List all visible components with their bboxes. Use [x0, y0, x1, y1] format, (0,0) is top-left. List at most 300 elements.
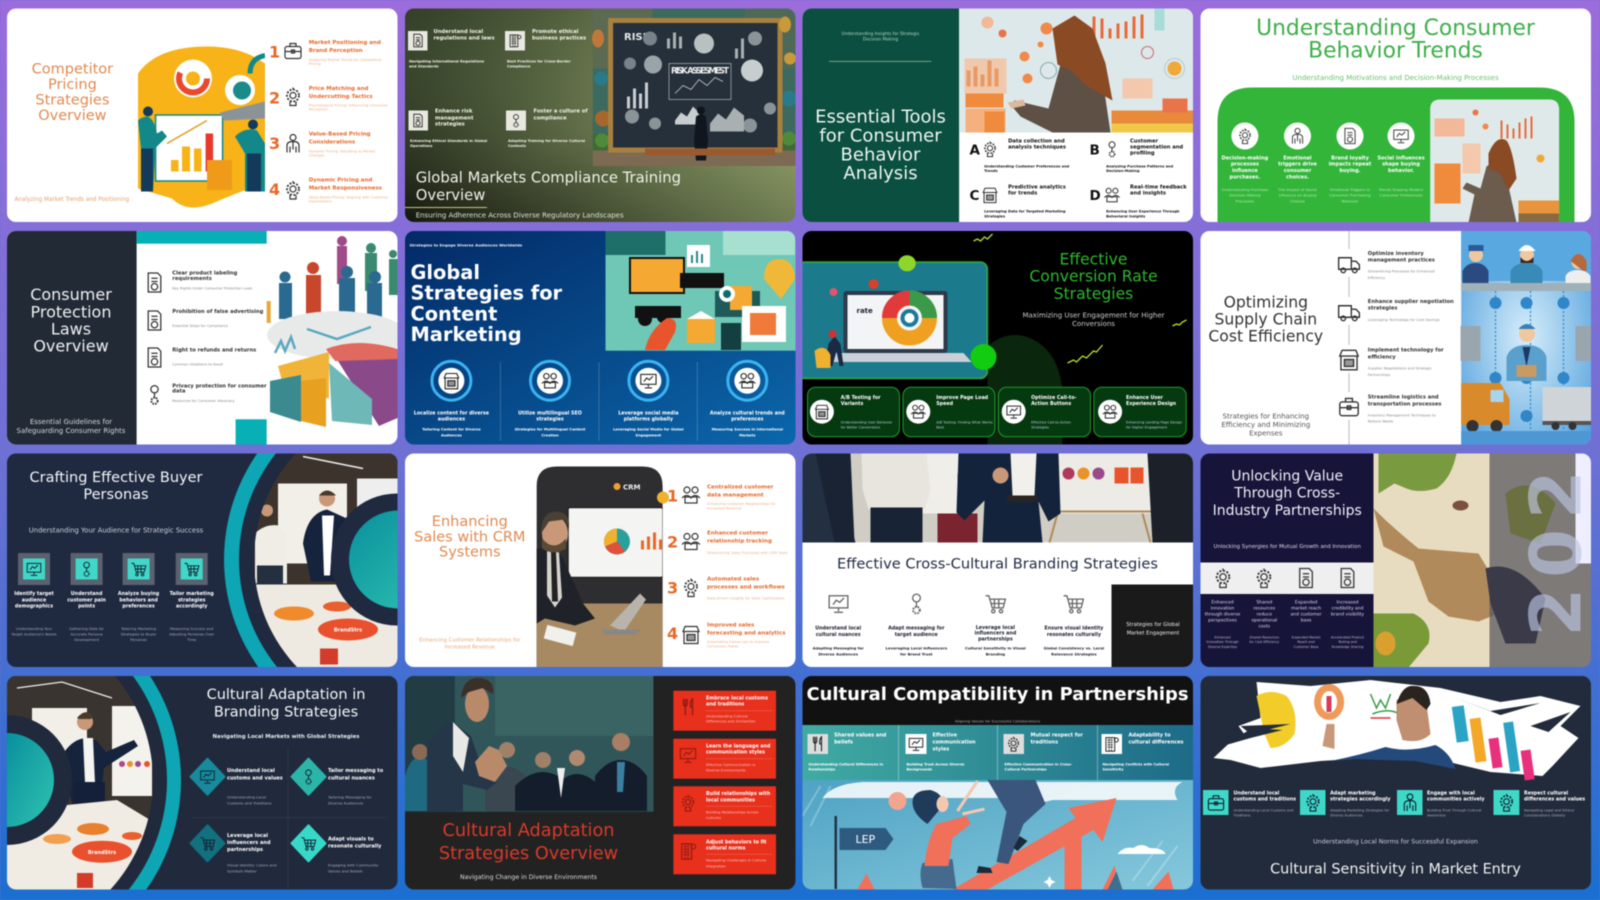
item: cultural nuances: cultural nuances [816, 632, 861, 638]
icon [1300, 569, 1312, 587]
item: emotional triggers: Choices [1290, 198, 1305, 204]
item: page load: Speed [936, 401, 954, 407]
item: shared values: beliefs [834, 740, 853, 746]
item: A/B testing: Understanding User Behavior [841, 420, 892, 424]
item: localize content: audiences [438, 417, 465, 423]
item: tailor marketing [169, 553, 215, 642]
icon [1341, 569, 1354, 587]
item: demographics: Target Audience's Needs [10, 632, 57, 636]
title: Crafting Effective Buyer [29, 470, 203, 486]
item: mutual respect [1004, 733, 1083, 771]
item B [1090, 138, 1183, 173]
item 4: Dynamic Pricing and [309, 178, 372, 184]
panel: Consumer Protection Laws Overview [7, 231, 407, 444]
item: shared resources: Shared Resources [1250, 636, 1279, 640]
item: risk management: Enhance risk [435, 108, 472, 114]
subtitle: Analyzing Market Trends and Positioning [14, 197, 130, 203]
item: customs: Embrace local customs [706, 696, 768, 701]
subtitle: Strategies for Enhancing [1223, 412, 1309, 420]
item: customs and traditions: Traditions [1232, 813, 1251, 817]
item: technology: Partnerships [1368, 373, 1390, 377]
title: for Consumer [819, 126, 942, 146]
title: Protection [31, 302, 111, 321]
item: call-to-action: Effective Call-to-Action [1031, 420, 1071, 424]
item: social media [613, 361, 684, 438]
item: inventory: management practices [1368, 258, 1435, 264]
item: communication: Building Trust Across Diverse [906, 762, 964, 766]
subtitle: Understanding Local Norms for Successful Expansion [1313, 838, 1478, 845]
icon [1231, 122, 1258, 150]
item 1: Increased Revenue [707, 506, 742, 510]
subtitle: Safeguarding Consumer Rights [17, 427, 126, 435]
item: language [673, 739, 776, 779]
icon [913, 594, 920, 613]
title: Effective [1059, 250, 1128, 268]
item: behaviors: cultural norms [706, 846, 746, 852]
item: shared resources: for Cost Efficiency [1249, 640, 1279, 644]
item: adaptability [1102, 733, 1183, 771]
item: cultural differences: differences and values [1524, 796, 1585, 802]
subtitle: Conversions [1072, 320, 1115, 328]
item: refunds: Right to refunds and returns [172, 347, 256, 353]
item: visual identity: Global Consistency vs. Local [1044, 646, 1104, 650]
title: Cultural Adaptation [442, 821, 615, 841]
item B: B [1090, 142, 1100, 158]
item: decision-making: processes [1231, 162, 1259, 168]
icon [728, 361, 767, 400]
sign: LEP [834, 816, 894, 889]
item 1: Pricing [309, 62, 321, 66]
item: local regulations: Navigating International Regulations [409, 60, 484, 64]
icon [683, 795, 693, 811]
item: innovation: Diverse Expertise [1208, 645, 1237, 649]
item: customs: Understanding Cultural [706, 715, 748, 719]
item: innovation: Innovation Through [1206, 640, 1239, 644]
item 1 [667, 484, 776, 510]
decorative teal ring and photo [7, 676, 181, 890]
item: marketing strategies: Adapting Marketing Strategies for [1330, 809, 1389, 813]
item: marketing strategies: Diverse Audiences [1330, 813, 1363, 817]
subtitle: Enhancing Customer Relationships for [419, 638, 520, 644]
icon [71, 553, 103, 585]
item: labeling [148, 271, 252, 292]
item: marketing strategies [1300, 790, 1391, 817]
item: language: Effective Communication in [706, 763, 756, 767]
item: call-to-action [998, 387, 1090, 437]
icon [682, 487, 700, 503]
item: social media: Leverage social media [618, 411, 679, 416]
item: market reach [1291, 569, 1322, 649]
item: localize content: Tailoring Content for Diverse [422, 428, 481, 432]
sign: LEP: LEP [855, 833, 876, 846]
icon [1388, 122, 1414, 150]
item: marketing strategies: Adapt marketing [1330, 791, 1376, 796]
title: Analysis [843, 163, 918, 184]
title: Cultural Compatibility in Partnerships [806, 684, 1188, 705]
decorative teal ring and photo: BrandStrs [334, 628, 362, 634]
item: pain points: customer pain [67, 598, 107, 604]
item: local communities [1397, 790, 1485, 817]
item: local communities: Building Trust Through Cultural [1427, 809, 1481, 813]
item: social influences: Trends Shaping Modern [1379, 187, 1423, 192]
item: social influences: Consumer Preferences [1380, 192, 1422, 198]
item: ethical business: Best Practices for Cross-Border [507, 60, 571, 64]
item: technology [1336, 345, 1444, 377]
item: customs and values: Understand local [227, 768, 275, 774]
item: local influencers: Leverage local [227, 833, 268, 839]
item: risk management [408, 108, 487, 148]
item 3: 3 [667, 578, 678, 598]
icon [808, 734, 828, 754]
item: emotional triggers: triggers drive [1278, 162, 1317, 168]
item: multilingual SEO: Creation [541, 434, 559, 438]
item 1: Centralized customer [707, 484, 773, 490]
photo: man at CRM dashboard: CRM [623, 484, 641, 492]
icon [682, 534, 700, 550]
callout: tagline box: Market Engagement [1127, 630, 1179, 636]
item 1: data management [707, 492, 764, 498]
item A: analysis techniques [1008, 144, 1066, 150]
item: cultural trends: preferences [731, 417, 764, 423]
item: user experience: Enhance User [1126, 396, 1163, 401]
item: visual identity: Ensure visual identity [1044, 626, 1103, 632]
title: Strategies for [410, 282, 563, 305]
icon [684, 699, 692, 715]
item: localize content: Audiences [441, 434, 462, 438]
item: cultural trends: Measuring Success in International [712, 428, 783, 432]
item: adapt visuals: Engaging with Community [328, 862, 378, 867]
photo: risk assessment chalkboard [592, 8, 797, 166]
item: pain points: Understand [71, 592, 102, 597]
icon [829, 596, 848, 612]
item D: D [1090, 188, 1101, 204]
panel: Effective Cross-Cultural Branding Strategies [802, 454, 1193, 667]
item: shared resources: reduce [1257, 612, 1272, 618]
item 2: Psychological Pricing: Influencing Consumer [309, 104, 388, 108]
item 4: 4 [667, 624, 678, 643]
item: demographics: demographics [15, 604, 53, 610]
item: tailor marketing: Time [186, 638, 197, 642]
photo: man pointing with team [405, 676, 654, 812]
item B: segmentation and [1130, 144, 1183, 150]
item A: A [970, 142, 980, 158]
subtitle: Aligning Values for Successful Collaborations [955, 718, 1040, 723]
item: market reach: Expanded [1295, 600, 1317, 606]
item: local influencers: influencers and [227, 840, 271, 846]
item: local influencers: partnerships [227, 847, 263, 853]
item: inventory: Streamlining Processes for Enhanced [1368, 270, 1435, 274]
title: Global Markets Compliance Training [416, 170, 681, 186]
item: customs and traditions: customs and traditions [1234, 796, 1296, 802]
title: Behavior [841, 144, 921, 166]
title: Conversion Rate [1029, 268, 1158, 286]
subtitle: Essential Guidelines for [30, 418, 112, 426]
icon [1203, 790, 1228, 815]
illustration: laptop with donut chart: rate [856, 307, 873, 315]
item: culture of compliance: Adapting Training for Diverse Cultural [508, 139, 585, 143]
title: Cost Efficiency [1208, 328, 1323, 346]
item 4: 4 [269, 180, 280, 199]
decorative year numerals: 202 [1516, 460, 1598, 636]
title: Overview [38, 108, 107, 124]
icon [1336, 249, 1362, 277]
eyebrow text: Strategies to Engage Diverse Audiences Worldwide [410, 243, 523, 248]
item: market reach: market reach [1291, 606, 1321, 612]
item: demographics: Understanding Your [16, 627, 52, 631]
subtitle: Understanding Insights for Strategic [842, 32, 919, 37]
item: cultural differences: Respect cultural [1524, 791, 1568, 796]
item: adapt visuals [292, 825, 382, 874]
item 2: Enhanced customer [707, 530, 768, 536]
item: behaviors [673, 834, 776, 874]
item: risk management: Enhancing Ethical Standards in Global [410, 139, 487, 143]
item: social influences: shape buying [1382, 162, 1420, 168]
item: logistics: transportation processes [1368, 401, 1441, 407]
icon [1336, 297, 1362, 325]
item B: Customer [1130, 138, 1158, 144]
item: tailor messaging [292, 759, 384, 805]
item: inventory [1336, 249, 1435, 280]
item C: Predictive analytics [1008, 184, 1066, 190]
item 4: Improved sales [707, 622, 754, 628]
item: emotional triggers: consumer [1284, 168, 1312, 174]
item 4 [667, 622, 786, 648]
item: relationships: Build relationships with [706, 792, 770, 797]
item: user experience: for Higher Engagement [1126, 425, 1168, 429]
item B: Decision-Making [1106, 169, 1140, 173]
item: refunds: Common Violations to Avoid [172, 362, 223, 366]
item: labeling: requirements [172, 276, 212, 282]
item: ethical business: business practices [532, 36, 586, 42]
item: adapt messaging: Adapt messaging for [888, 626, 944, 632]
illustration: marketing team with chart [138, 46, 265, 208]
item: A/B testing: for Better Conversions [841, 425, 880, 429]
photo: team at branding boards [802, 454, 1193, 542]
icon [1494, 790, 1519, 815]
icon [18, 553, 50, 585]
icon [1258, 569, 1270, 587]
item: culture of compliance: Contexts [508, 144, 526, 148]
item: market reach: base [1301, 618, 1312, 624]
title: Systems [439, 544, 501, 560]
item: shared resources: costs [1258, 624, 1271, 630]
item: user experience: Enhancing Landing Page Design [1126, 420, 1182, 424]
item: cultural nuances [813, 596, 864, 656]
item: labeling: Clear product labeling [172, 271, 237, 277]
item: visual identity: Relevance Strategies [1051, 652, 1097, 656]
item: visual identity: resonates culturally [1047, 632, 1102, 638]
item: marketing strategies: strategies accordingly [1330, 796, 1391, 802]
item D: Enhancing User Experience Through [1106, 210, 1179, 214]
item: communication: Effective [932, 733, 957, 739]
panel: Essential Tools for Consumer Behavior Analysis [802, 8, 1193, 222]
item: decision-making: purchases. [1230, 174, 1260, 180]
item: cultural nuances: Understand local [815, 626, 861, 632]
item: innovation: innovation [1211, 606, 1235, 612]
title: Understanding Consumer [1256, 16, 1535, 41]
item: emotional triggers: The Impact of Social [1278, 187, 1317, 192]
item: local influencers: Symbols Matter [227, 869, 257, 874]
subtitle: Unlocking Synergies for Mutual Growth and Innovation [1214, 544, 1361, 550]
icon [505, 31, 525, 50]
item: decision-making [1222, 122, 1269, 204]
item: supplier: Leveraging Technology for Cost Savings [1368, 318, 1440, 322]
item: emotional triggers: Emotional [1283, 156, 1312, 162]
item: demographics: audience [22, 598, 47, 604]
icon [190, 825, 224, 861]
panel: Cultural Sensitivity in Market Entry [1200, 676, 1591, 890]
item: local regulations: Understand local [434, 29, 483, 35]
item D [1090, 184, 1187, 218]
item: local influencers: Leverage local [976, 626, 1015, 631]
icon [680, 749, 696, 762]
item: page load [903, 387, 995, 437]
panel: Understanding Consumer Behavior Trends [1200, 8, 1591, 222]
panel: Cultural Adaptation in Branding Strategies [7, 676, 398, 890]
item A [970, 138, 1070, 173]
icon [683, 626, 699, 644]
item 2 [269, 86, 388, 112]
item: privacy: Privacy protection for consumer [172, 383, 267, 389]
item: behaviors: Navigating Challenges in Cultural [706, 859, 766, 863]
item: local regulations [408, 29, 495, 68]
item: mutual respect: Cultural Partnerships [1004, 767, 1047, 771]
item: pain points: points [78, 604, 95, 610]
icon [906, 734, 926, 754]
item 1: Enhancing Customer Relationships for [707, 502, 776, 506]
item: call-to-action: Optimize Call-to- [1031, 396, 1077, 401]
item 1: 1 [667, 486, 678, 506]
item: local communities: communities actively [1427, 796, 1485, 802]
item: logistics: Streamline logistics and [1368, 394, 1439, 400]
item: demographics: Identify target [14, 592, 54, 597]
icon [148, 273, 161, 292]
item 2: relationship tracking [707, 538, 772, 544]
item: privacy: Resources for Consumer Advocacy [172, 399, 236, 403]
subtitle: Understanding Your Audience for Strategic Success [29, 526, 204, 534]
item: mutual respect: traditions [1030, 740, 1058, 746]
item D: Behavioral Insights [1106, 214, 1145, 218]
item 2: 2 [667, 532, 678, 552]
icon [1102, 734, 1122, 754]
item: inventory: Efficiency [1368, 276, 1386, 280]
item: supplier [1336, 297, 1454, 325]
photo: woman viewing data wall [1430, 100, 1560, 222]
item: buying behaviors: Strategies to Buyer [121, 632, 157, 636]
item: local influencers: Branding [986, 652, 1005, 656]
item: local communities: Awareness [1427, 813, 1446, 817]
item: adapt messaging: Leveraging Local Influencers [886, 646, 947, 650]
item C: Strategies [984, 214, 1005, 218]
item: shared values: Shared values and [834, 733, 886, 739]
item: false advertising [148, 309, 264, 330]
icon [1397, 790, 1422, 815]
item: page load: Best [936, 425, 945, 429]
item: local influencers [965, 596, 1026, 656]
panel: Cultural Compatibility in Partnerships [802, 676, 1193, 890]
item 3 [667, 576, 786, 600]
icon [1098, 400, 1122, 424]
item 2: 2 [269, 88, 280, 107]
item 3: Dynamic Pricing: Adjusting to Market [309, 150, 375, 154]
item 2 [667, 530, 788, 555]
title: Overview [33, 337, 109, 356]
panel: Crafting Effective Buyer Personas [7, 374, 596, 746]
icon [1300, 790, 1326, 815]
item: pain points: Development [74, 638, 100, 642]
subtitle: Navigating Local Markets with Global Strategies [212, 734, 360, 740]
item 2: Price Matching and [309, 86, 368, 92]
item: false advertising: Prohibition of false advertising [172, 309, 264, 315]
item: shared resources [1249, 569, 1279, 644]
title: Cultural Sensitivity in Market Entry [1270, 861, 1521, 877]
item: relationships: Building Relationships Across [706, 811, 759, 815]
item: localize content [414, 361, 490, 438]
panel: Global Markets Compliance Training Overview [405, 8, 797, 222]
item: pain points: Accurate Persona [71, 632, 103, 636]
photo: risk assessment chalkboard: RISK ASSESMEST [671, 66, 729, 76]
panel: Optimizing Supply Chain Cost Efficiency [1200, 231, 1592, 444]
item: buying behaviors: preferences [122, 604, 155, 610]
item: credibility: Increased [1337, 600, 1358, 606]
item: local regulations: and Standards [409, 64, 439, 68]
item: innovation: Enhanced [1211, 600, 1234, 606]
item: customs and values: customs and values [227, 775, 283, 781]
item: risk management: Operations [410, 144, 432, 148]
title: Pricing [48, 77, 97, 93]
item: buying behaviors: Tailoring Marketing [121, 627, 156, 631]
icon [682, 844, 696, 859]
item: emotional triggers: choices. [1286, 174, 1309, 180]
item C: for trends [1008, 190, 1037, 196]
icon [985, 141, 995, 157]
item: language: Learn the language and [706, 744, 770, 749]
title: Marketing [410, 323, 522, 346]
icon [685, 578, 697, 596]
item 3: Changes [309, 154, 324, 158]
item: market reach: and customer [1291, 612, 1322, 618]
item 3: 3 [269, 134, 280, 153]
item: communication: Backgrounds [906, 767, 932, 771]
item: adapt visuals: Values and Beliefs [328, 869, 363, 874]
item: credibility: Testing and [1337, 640, 1357, 644]
item: social influences: behavior. [1388, 168, 1414, 174]
title: Cultural Adaptation in [207, 687, 365, 703]
item: innovation: through diverse [1205, 612, 1241, 618]
title: Branding Strategies [214, 704, 358, 720]
item 4 [269, 178, 389, 204]
item: credibility: credibility and [1331, 606, 1364, 612]
item: emotional triggers [1277, 122, 1317, 204]
item: credibility [1331, 569, 1365, 649]
item: adaptability: Navigating Conflicts with Cultural [1102, 762, 1169, 766]
item 3: Value-Based Pricing [309, 132, 371, 138]
item: innovation: Enhanced [1214, 636, 1231, 640]
item 2: Undercutting Tactics [309, 94, 373, 100]
item 1: Market Positioning and [309, 40, 381, 46]
illustration: climbing the growth arrow [802, 780, 1193, 890]
item: demographics [10, 553, 57, 636]
item: market reach: Expanded Market [1292, 636, 1321, 640]
icon: dollar gear [287, 88, 299, 106]
item: user experience: Experience Design [1126, 401, 1177, 407]
item: market reach: Reach and [1297, 640, 1315, 644]
item: local influencers: Cultural Sensitivity in Visual [965, 646, 1026, 650]
item: ethical business [505, 29, 586, 68]
item: refunds [148, 347, 256, 367]
item C [970, 184, 1066, 218]
title: Global [410, 261, 480, 284]
